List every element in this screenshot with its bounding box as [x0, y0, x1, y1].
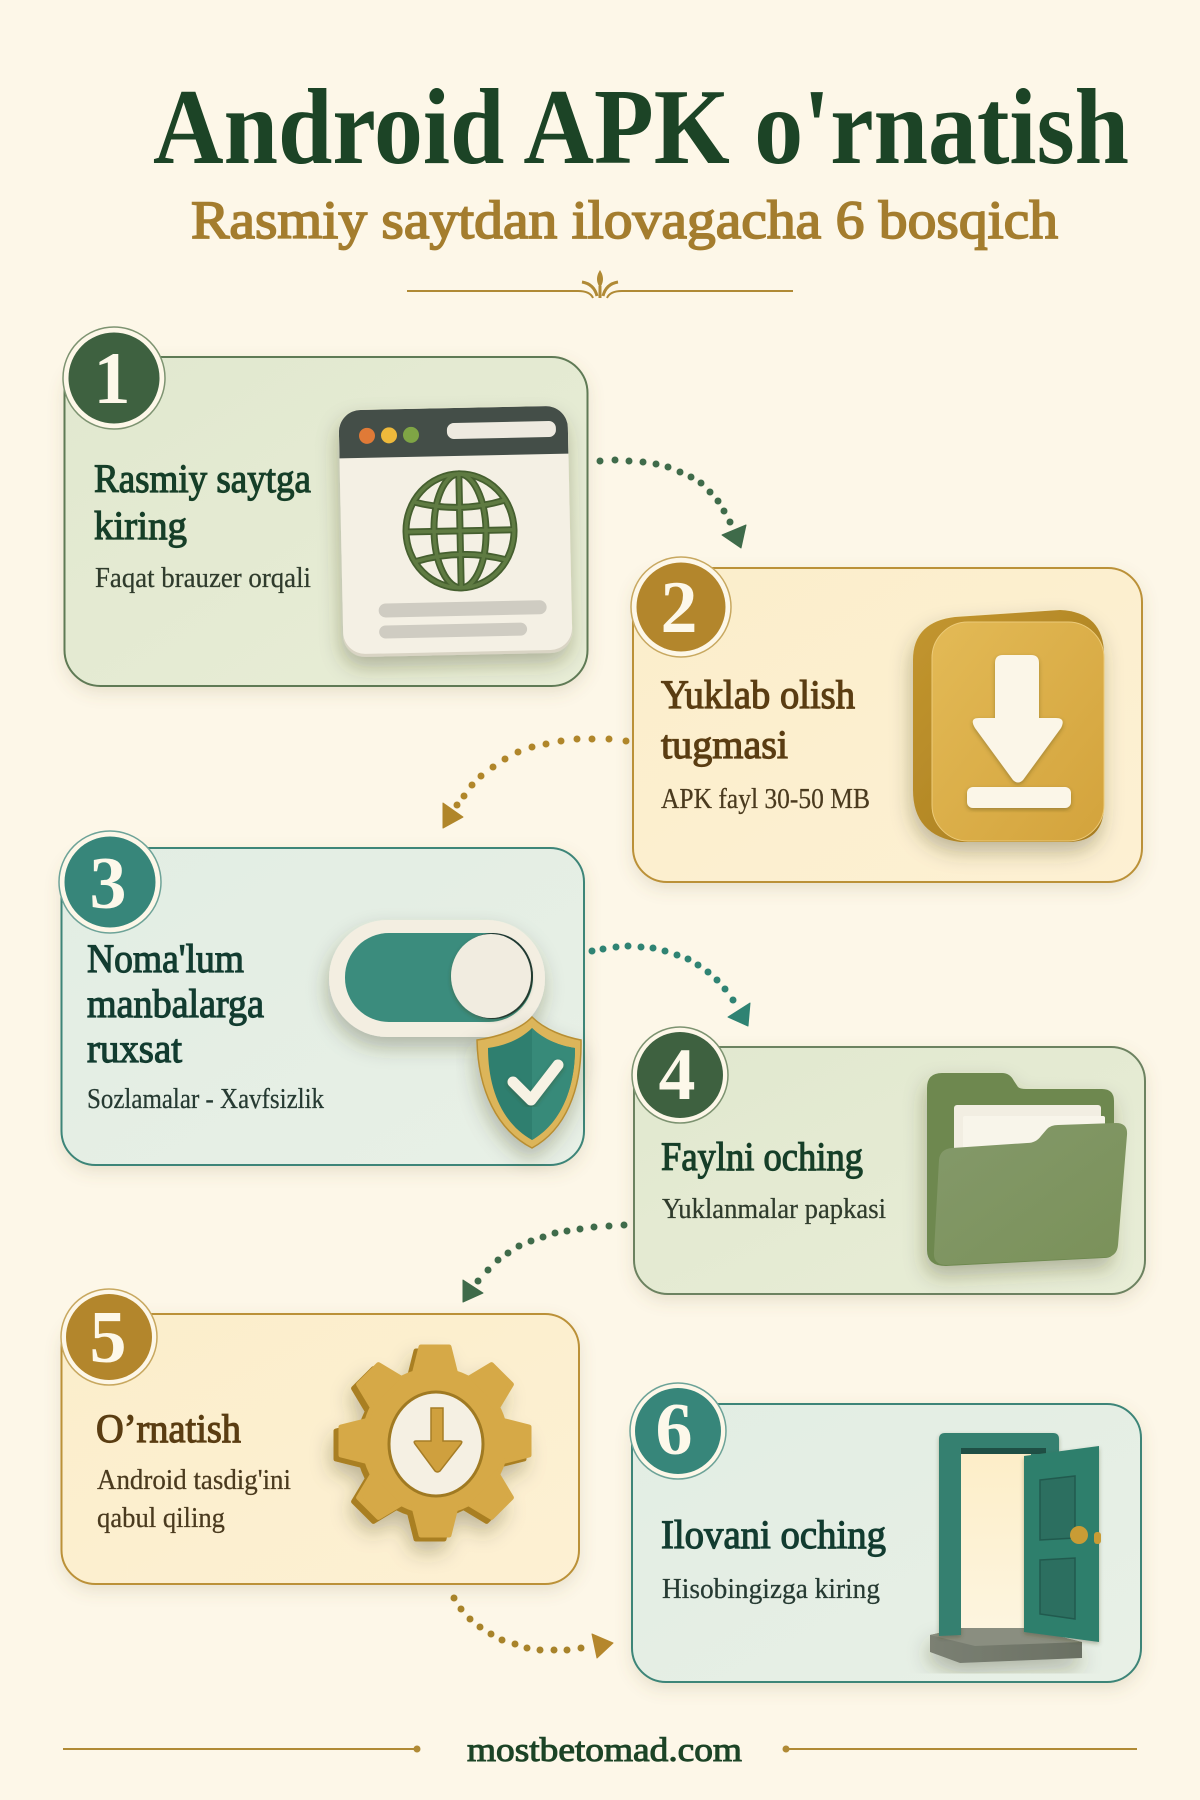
step 4 heading: Faylni oching [661, 1134, 863, 1179]
step 5 description: Android tasdig'ini [97, 1465, 291, 1496]
badge 4: 4 [658, 1034, 696, 1116]
step 2 description: APK fayl 30-50 MB [661, 784, 870, 815]
badge 5: 5 [90, 1297, 126, 1379]
badge 2 [631, 557, 731, 657]
panel: step 6 [630, 1383, 1141, 1682]
ornamental divider [407, 272, 793, 298]
badge 4 [632, 1027, 728, 1123]
step 4 description: Yuklanmalar papkasi [662, 1194, 886, 1225]
badge 1: 1 [94, 338, 130, 420]
step 5 heading: O’rnatish [96, 1406, 241, 1451]
arrow: step 4 to 5 [463, 1222, 628, 1302]
panel: step 4 [632, 1027, 1145, 1294]
step 3 heading: manbalarga [87, 981, 264, 1026]
card background 2 [633, 568, 1142, 882]
panel: step 2 [631, 557, 1142, 882]
arrow: step 1 to 2 [596, 456, 746, 548]
step 1 heading: Rasmiy saytga [94, 456, 311, 501]
badge 6 [630, 1383, 726, 1479]
step 3 heading [87, 936, 264, 1071]
arrow: step 5 to 6 [450, 1594, 613, 1658]
icon: security shield with check [477, 1017, 581, 1148]
step 5 description: qabul qiling [97, 1503, 225, 1534]
badge 3: 3 [90, 843, 126, 925]
card background 4 [634, 1047, 1145, 1294]
icon: open folder [927, 1073, 1127, 1266]
card background 1 [64, 357, 588, 686]
card background 5 [62, 1314, 579, 1584]
step 6 description: Hisobingizga kiring [662, 1574, 880, 1605]
card background 6 [632, 1404, 1141, 1682]
icon: open door [930, 1433, 1101, 1663]
icon: download button [913, 610, 1104, 842]
step 1 heading: kiring [94, 503, 187, 548]
step 6 heading: Ilovani oching [661, 1512, 886, 1557]
subtitle: Rasmiy saytdan ilovagacha 6 bosqich [191, 190, 1058, 250]
title: Android APK o'rnatish [153, 68, 1129, 187]
footer rule right [782, 1746, 1137, 1752]
arrow: step 2 to 3 [443, 736, 630, 828]
icon: browser window with globe [338, 406, 573, 657]
panel: step 5 [61, 1289, 579, 1584]
panel: step 3 [59, 831, 584, 1165]
badge 1 [63, 327, 165, 429]
step 5 description [97, 1465, 291, 1534]
step 2 heading: Yuklab olish [661, 672, 855, 717]
step 1 heading [94, 456, 311, 548]
step 2 heading [661, 672, 855, 767]
arrow: step 3 to 4 [588, 942, 750, 1026]
footer site name: mostbetomad.com [467, 1732, 742, 1769]
footer rule left [63, 1746, 420, 1752]
icon: gear with download arrow [336, 1347, 529, 1539]
step 2 heading: tugmasi [661, 722, 788, 767]
step 3 heading: Noma'lum [87, 936, 244, 981]
panel: step 1 [63, 327, 588, 686]
badge 6: 6 [656, 1389, 692, 1471]
step 1 description: Faqat brauzer orqali [95, 563, 311, 594]
step 3 description: Sozlamalar - Xavfsizlik [87, 1084, 324, 1115]
badge 2: 2 [660, 567, 698, 649]
icon: toggle switch [329, 920, 545, 1037]
step 3 heading: ruxsat [87, 1026, 182, 1071]
badge 3 [59, 831, 161, 933]
card background 3 [62, 848, 584, 1165]
badge 5 [61, 1289, 157, 1385]
